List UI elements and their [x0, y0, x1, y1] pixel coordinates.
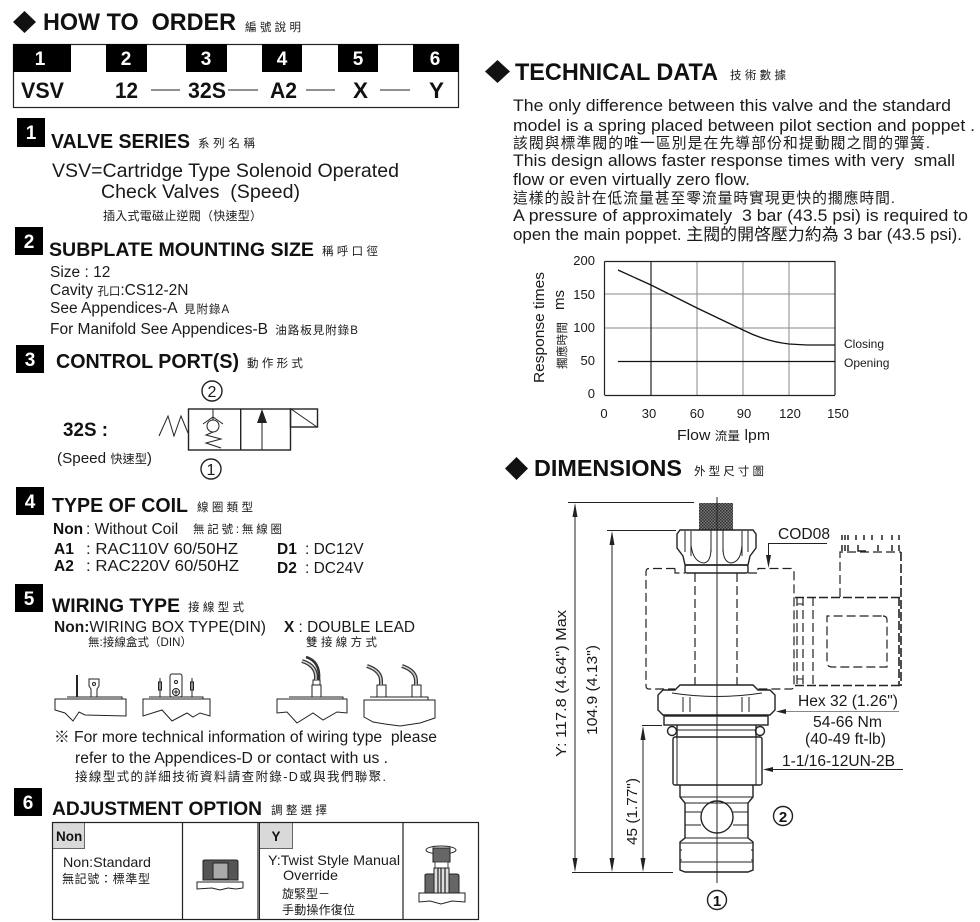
heading: dimensions: DIMENSIONS — [534, 455, 682, 481]
order code dashes — [151, 89, 410, 91]
table header numbers: 3 — [201, 49, 211, 70]
table header numbers — [35, 49, 440, 70]
valve description: 插入式電磁止逆閥（快速型） — [103, 208, 262, 223]
coil options: : Without Coil — [86, 521, 178, 538]
heading: how to order: HOW TO ORDER — [43, 9, 236, 36]
technical paragraph: flow or even virtually zero flow. — [513, 171, 750, 189]
option table: 無記號：標準型 — [62, 871, 150, 886]
order code values: 12 — [115, 78, 138, 103]
heading: chinese: 調整選擇 — [271, 803, 327, 817]
size details: See Appendices-A 見附錄A — [50, 300, 230, 317]
wiring note: ※ For more technical information of wiring type please — [54, 729, 437, 746]
line chart: response times — [531, 253, 889, 444]
heading: subplate mounting size: SUBPLATE MOUNTING SIZE — [49, 240, 314, 261]
port marker 2 — [774, 806, 792, 826]
x axis ticks: 60 — [690, 406, 704, 421]
icon: DIN connector side — [55, 675, 126, 721]
icon: diamond — [13, 11, 36, 33]
coil options: D1 — [277, 541, 297, 558]
icon: diamond — [505, 457, 528, 480]
table header numbers: 1 — [35, 49, 46, 70]
heading: adjustment option: ADJUSTMENT OPTION — [52, 799, 262, 820]
dimension labels rotated: 104.9 (4.13") — [584, 645, 601, 735]
number badge 5: 5 — [24, 589, 35, 610]
chart frame — [604, 261, 835, 396]
heading: wiring type: WIRING TYPE — [52, 595, 180, 617]
wiring note: refer to the Appendices-D or contact with us . — [75, 750, 388, 767]
coil options: : DC12V — [305, 541, 364, 558]
panel: order code table — [13, 44, 459, 108]
x axis ticks: 150 — [827, 406, 849, 421]
y axis title: ms — [551, 290, 568, 310]
hydraulic symbol: 2 — [208, 384, 217, 401]
port marker 1: 1 — [713, 893, 721, 910]
icon: diamond — [485, 60, 510, 83]
closing curve — [618, 270, 835, 345]
panel: 5 wiring type — [15, 584, 437, 784]
number badge 6 — [14, 788, 42, 816]
number badge 5 — [15, 584, 43, 612]
nut — [677, 530, 756, 573]
technical paragraph: open the main poppet. 主閥的開啓壓力約為 3 bar (43.5 psi). — [513, 225, 962, 244]
option table: Y — [271, 829, 281, 844]
heading: chinese: 接線型式 — [188, 600, 244, 614]
table header numbers: 4 — [277, 49, 288, 70]
port marker 1 — [708, 890, 726, 910]
technical paragraph: The only difference between this valve and the standard — [513, 97, 951, 115]
hex body — [658, 685, 775, 725]
callout: hex torque: (40-49 ft-lb) — [805, 731, 886, 748]
callout: COD08: COD08 — [778, 526, 830, 543]
dimension labels rotated — [553, 609, 641, 845]
valve description: VSV=Cartridge Type Solenoid Operated — [52, 160, 399, 182]
panel: technical data — [485, 59, 975, 244]
number badge 4 — [16, 487, 44, 515]
port marker 2: 2 — [779, 809, 787, 826]
size details — [50, 264, 359, 338]
heading: series chinese: 系列名稱 — [198, 136, 256, 150]
chart grid — [604, 261, 835, 395]
center axis — [716, 497, 718, 883]
table header numbers: 2 — [121, 49, 131, 70]
order code values — [21, 78, 444, 103]
icon: DIN connector front — [143, 674, 210, 721]
panel: 4 type of coil — [16, 487, 364, 577]
icon: twist style adjustment — [419, 846, 465, 904]
wiring options: X : DOUBLE LEAD — [284, 619, 415, 636]
order code values: 32S — [188, 78, 226, 103]
heading: chinese: 技術數據 — [730, 68, 786, 82]
heading: type of coil: TYPE OF COIL — [52, 495, 188, 517]
dimension lines — [568, 502, 694, 872]
coil options: 無記號:無線圈 — [193, 522, 282, 536]
wiring note: 接線型式的詳細技術資料請查附錄-D或與我們聯聚. — [75, 769, 386, 784]
number badge 4: 4 — [25, 492, 36, 513]
x axis ticks: 120 — [779, 406, 801, 421]
callout: hex torque — [776, 693, 899, 748]
table outline — [14, 44, 458, 108]
option table: Y:Twist Style Manual — [268, 852, 400, 868]
coil options: A2 — [54, 558, 74, 575]
wiring note — [54, 729, 437, 784]
cartridge body — [668, 725, 764, 872]
callout: hex torque: Hex 32 (1.26") — [798, 693, 898, 710]
coil options: : RAC110V 60/50HZ — [86, 541, 238, 558]
panel: how to order header — [13, 9, 301, 36]
icon: double lead connector two wires — [364, 666, 435, 726]
size details: Cavity 孔口:CS12-2N — [50, 282, 188, 299]
x axis ticks: 90 — [737, 406, 751, 421]
y axis title: 擱應時間 — [555, 322, 569, 369]
option table: Override — [283, 867, 338, 883]
table header numbers: 5 — [353, 49, 364, 70]
option table: 手動操作復位 — [282, 902, 355, 917]
coil options: A1 — [54, 541, 74, 558]
dimension labels rotated: Y: 117.8 (4.64") Max — [553, 609, 570, 757]
table header black cells — [13, 44, 459, 72]
solenoid coil dashed — [646, 568, 794, 689]
coil options — [53, 521, 364, 577]
panel: 3 control port — [16, 345, 318, 479]
number badge 3: 3 — [25, 350, 35, 371]
panel: 2 subplate mounting size — [15, 227, 378, 338]
y axis ticks — [573, 253, 595, 401]
coil options: D2 — [277, 560, 297, 577]
y axis title: Response times — [531, 272, 548, 383]
technical paragraph: model is a spring placed between pilot section and poppet . — [513, 117, 975, 135]
icon: double lead connector — [277, 657, 347, 723]
wiring options — [54, 619, 415, 649]
size details: For Manifold See Appendices-B 油路板見附錄B — [50, 321, 359, 338]
option table: Non — [56, 829, 82, 844]
y axis title — [531, 272, 569, 383]
heading: valve series: VALVE SERIES — [51, 131, 190, 153]
label 32S: 32S : — [63, 420, 108, 441]
callout: thread: 1-1/16-12UN-2B — [782, 753, 895, 770]
valve drawing — [646, 497, 901, 883]
number badge 3 — [16, 345, 44, 373]
number badge 2 — [15, 227, 43, 255]
wiring options: 雙接線方式 — [306, 635, 378, 649]
callout: hex torque: 54-66 Nm — [813, 714, 882, 731]
hydraulic symbol: 1 — [207, 462, 216, 479]
label speed: (Speed 快速型) — [57, 450, 152, 467]
x axis ticks: 0 — [600, 406, 608, 421]
technical paragraph: A pressure of approximately 3 bar (43.5 psi) is required to — [513, 207, 968, 225]
x axis ticks — [600, 406, 849, 421]
coil options: : RAC220V 60/50HZ — [86, 558, 239, 575]
series labels: Closing — [844, 337, 884, 351]
size details: Size : 12 — [50, 264, 110, 281]
wiring options: 無:接線盒式（DIN） — [88, 635, 192, 649]
dimension labels rotated: 45 (1.77") — [624, 778, 641, 845]
panel: 1 valve series — [17, 118, 399, 223]
order code values: X — [353, 78, 368, 103]
series labels — [844, 337, 889, 370]
heading: control ports: CONTROL PORT(S) — [56, 351, 239, 373]
coil options: : DC24V — [305, 560, 364, 577]
x axis ticks: 30 — [642, 406, 656, 421]
panel: 6 adjustment option — [14, 788, 478, 920]
knurled knob — [699, 503, 733, 530]
technical paragraph: This design allows faster response times with very small — [513, 152, 955, 170]
option table: 旋緊型－ — [282, 887, 330, 901]
valve description: Check Valves (Speed) — [101, 181, 300, 203]
table header numbers: 6 — [430, 49, 440, 70]
heading: technical data: TECHNICAL DATA — [515, 59, 718, 86]
heading: chinese: 稱呼口徑 — [322, 245, 378, 258]
order code values: VSV — [21, 78, 64, 103]
series labels: Opening — [844, 356, 889, 370]
option table — [52, 822, 478, 920]
order code values: A2 — [270, 78, 297, 103]
y axis ticks: 150 — [573, 287, 595, 302]
option table: Non:Standard — [63, 854, 151, 870]
number badge 1 — [17, 118, 45, 147]
technical paragraph: 這樣的設計在低流量甚至零流量時實現更快的擱應時間. — [513, 189, 895, 207]
number badge 1: 1 — [26, 123, 37, 144]
coil options: Non — [53, 521, 83, 538]
number badge 6: 6 — [23, 793, 33, 814]
icon: standard adjustment — [197, 860, 243, 890]
y axis ticks: 100 — [573, 320, 595, 335]
hydraulic symbol — [159, 381, 318, 479]
opening line — [618, 360, 835, 362]
y axis ticks: 200 — [573, 253, 595, 268]
y axis ticks: 0 — [588, 386, 595, 401]
heading: chinese: 線圈類型 — [197, 500, 253, 514]
order code values: Y — [429, 78, 444, 103]
panel: dimensions — [505, 455, 903, 910]
wiring options: Non:WIRING BOX TYPE(DIN) — [54, 619, 266, 636]
heading: chinese: 外型尺寸圖 — [694, 464, 764, 478]
valve description — [52, 160, 399, 223]
technical paragraph: 該閥與標準閥的唯一區別是在先導部份和提動閥之間的彈簧. — [513, 135, 930, 152]
technical paragraph — [513, 97, 975, 244]
callout: COD08 — [766, 526, 830, 568]
solenoid side connector dashed — [795, 535, 901, 687]
number badge 2: 2 — [24, 232, 34, 253]
x axis title: Flow 流量 lpm — [677, 427, 770, 444]
y axis ticks: 50 — [581, 353, 595, 368]
heading: chinese: 動作形式 — [247, 356, 304, 370]
heading: chinese subtitle: 編號說明 — [245, 21, 301, 34]
